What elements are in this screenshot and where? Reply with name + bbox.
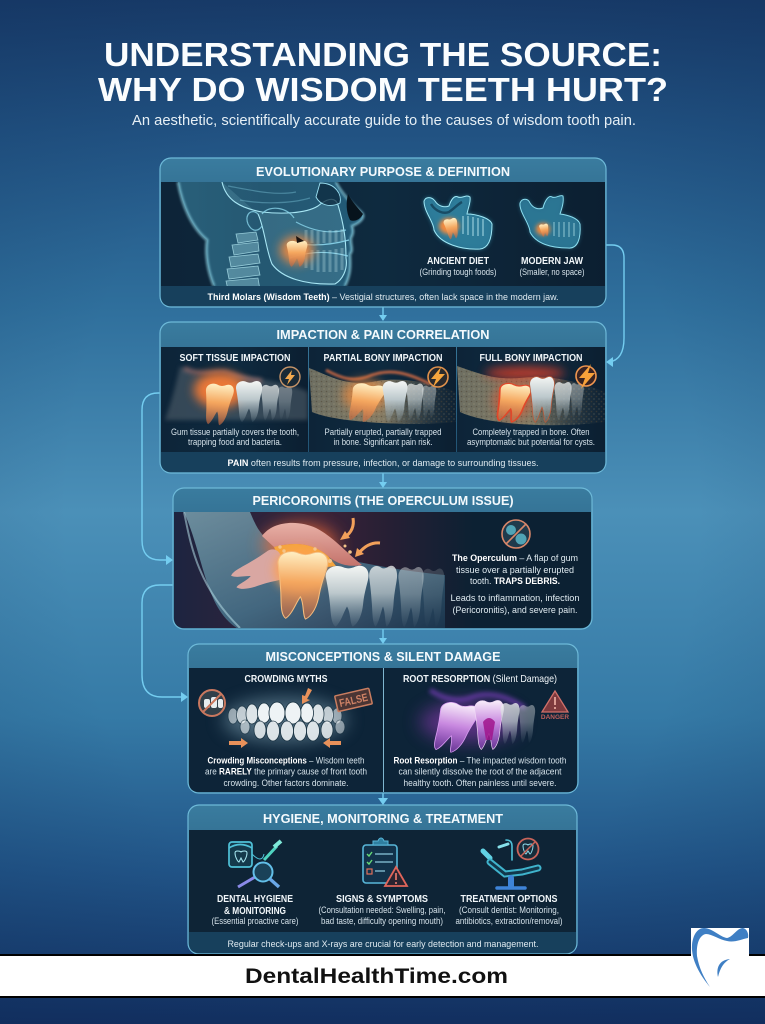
flow connector: panel 1 to panel 2 (right side) [606,245,624,367]
label: dental hygiene: & MONITORING [224,905,286,917]
icon: modern jaw [520,196,580,248]
icon: checklist and warning [363,838,407,886]
label: dental hygiene [212,893,298,926]
column: soft tissue impaction: trapping food and bacteria. [188,437,282,447]
center arrow: panel 2 to 3 [379,473,387,488]
text: resorption: Root Resorption – The impacted wisdom tooth [394,756,566,766]
footer website text: DentalHealthTime.com [245,965,508,988]
heading: evolutionary purpose: EVOLUTIONARY PURPOSE & DEFINITION [256,164,510,179]
illustration: purple teeth [420,690,535,755]
icon: danger: DANGER [541,714,569,721]
column: full bony impaction [457,347,605,452]
label: treatment options: TREATMENT OPTIONS [460,893,558,905]
icon: ancient jaw [424,196,492,249]
label: modern jaw: (Smaller, no space) [520,267,584,277]
column: root resorption: can silently dissolve the root of the adjacent [398,766,562,776]
logo: tooth [691,928,749,987]
heading: pericoronitis: PERICORONITIS (THE OPERCULUM ISSUE) [252,493,514,508]
text: operculum definition: tissue over a partially erupted [456,565,574,576]
column: root resorption: healthy tooth. Often painless until severe. [404,778,556,788]
illustration: smile teeth [223,698,347,742]
label: ancient diet: ANCIENT DIET [427,255,489,267]
illustration: operculum over tooth [174,512,448,628]
flow connector: panel 2 to panel 3 (left side) [142,393,173,565]
title: UNDERSTANDING THE SOURCE: [104,36,662,73]
title: WHY DO WISDOM TEETH HURT? [98,71,668,108]
heading: hygiene: HYGIENE, MONITORING & TREATMENT [263,811,503,826]
column: partial bony impaction [309,347,456,452]
icon: pain bolt [280,367,300,387]
icon: no debris [502,520,530,548]
label: signs and symptoms: bad taste, difficulty opening mouth) [321,916,443,926]
icon: danger [541,691,569,721]
column: full bony impaction: asymptomatic but potential for cysts. [467,437,595,447]
icon: arrows pointing to debris [345,518,380,553]
heading: impaction: IMPACTION & PAIN CORRELATION [276,327,490,342]
panel: evolutionary purpose [160,158,606,307]
heading: misconceptions: MISCONCEPTIONS & SILENT DAMAGE [266,649,501,664]
column: crowding myths: crowding. Other factors dominate. [224,778,348,788]
label: treatment options: antibiotics, extraction/removal) [456,916,562,926]
label: signs and symptoms: SIGNS & SYMPTOMS [336,893,428,905]
icon: no crowding [199,690,225,716]
label: modern jaw [520,255,584,277]
column: root resorption: ROOT RESORPTION (Silent Damage) [403,673,557,685]
flow connector: panel 3 to panel 4 (left side) [142,585,188,702]
column: partial bony impaction: Partially erupted, partially trapped [324,427,442,437]
center arrow: panel 4 to 5 [378,793,388,805]
panel: misconceptions [188,644,578,793]
column: root resorption [394,673,569,788]
title [98,36,668,108]
icon: pain bolt [576,364,596,389]
icon: floss, brush and magnifier [229,841,281,887]
label: modern jaw: MODERN JAW [521,255,583,267]
text: operculum definition: (Pericoronitis), and severe pain. [452,605,578,616]
stamp: false: FALSE [338,692,369,710]
label: treatment options: (Consult dentist: Monitoring, [459,905,559,915]
footer banner [0,954,765,998]
column: soft tissue impaction [161,347,308,452]
illustration: x-ray skull [178,182,363,290]
center arrow: panel 1 to 2 [379,307,387,321]
column: partial bony impaction: in bone. Significant pain risk. [334,437,432,447]
panel: pericoronitis [173,488,592,630]
icon: dental chair [483,838,538,888]
column: soft tissue impaction: SOFT TISSUE IMPACTION [180,352,290,364]
label: ancient diet: (Grinding tough foods) [420,267,496,277]
column: full bony impaction: Completely trapped in bone. Often [472,427,590,437]
column: crowding myths [199,673,372,788]
label: dental hygiene: (Essential proactive care) [212,916,298,926]
caption: check-ups: Regular check-ups and X-rays are crucial for early detection and management. [228,939,538,950]
column: partial bony impaction: PARTIAL BONY IMPACTION [324,352,442,364]
label: treatment options [456,893,562,926]
text: crowding: Crowding Misconceptions – Wisdom teeth [208,756,364,766]
text: operculum definition [450,553,580,616]
subtitle: An aesthetic, scientifically accurate guide to the causes of wisdom tooth pain. [132,112,636,129]
caption: third molars: Third Molars (Wisdom Teeth) – Vestigial structures, often lack space in the modern jaw. [208,292,558,303]
icon: pain bolt [428,367,448,387]
label: dental hygiene: DENTAL HYGIENE [217,893,293,905]
arrows: crowding force [229,688,341,748]
text: operculum definition: Leads to inflammation, infection [450,593,580,604]
label: signs and symptoms: (Consultation needed: Swelling, pain, [318,905,446,915]
center arrow: panel 3 to 4 [379,629,387,644]
label: signs and symptoms [318,893,446,926]
column: crowding myths: are RARELY the primary cause of front tooth [205,766,367,776]
column: soft tissue impaction: Gum tissue partially covers the tooth, [171,427,299,437]
panel: impaction and pain [160,322,606,473]
column: full bony impaction: FULL BONY IMPACTION [480,352,582,364]
text: operculum definition: The Operculum – A flap of gum [452,553,578,564]
panel: hygiene monitoring treatment [188,805,577,954]
label: ancient diet [420,255,496,277]
column: crowding myths: CROWDING MYTHS [244,673,328,685]
text: operculum definition: tooth. TRAPS DEBRIS. [470,576,560,587]
caption: pain: PAIN often results from pressure, infection, or damage to surrounding tissues. [228,458,538,469]
